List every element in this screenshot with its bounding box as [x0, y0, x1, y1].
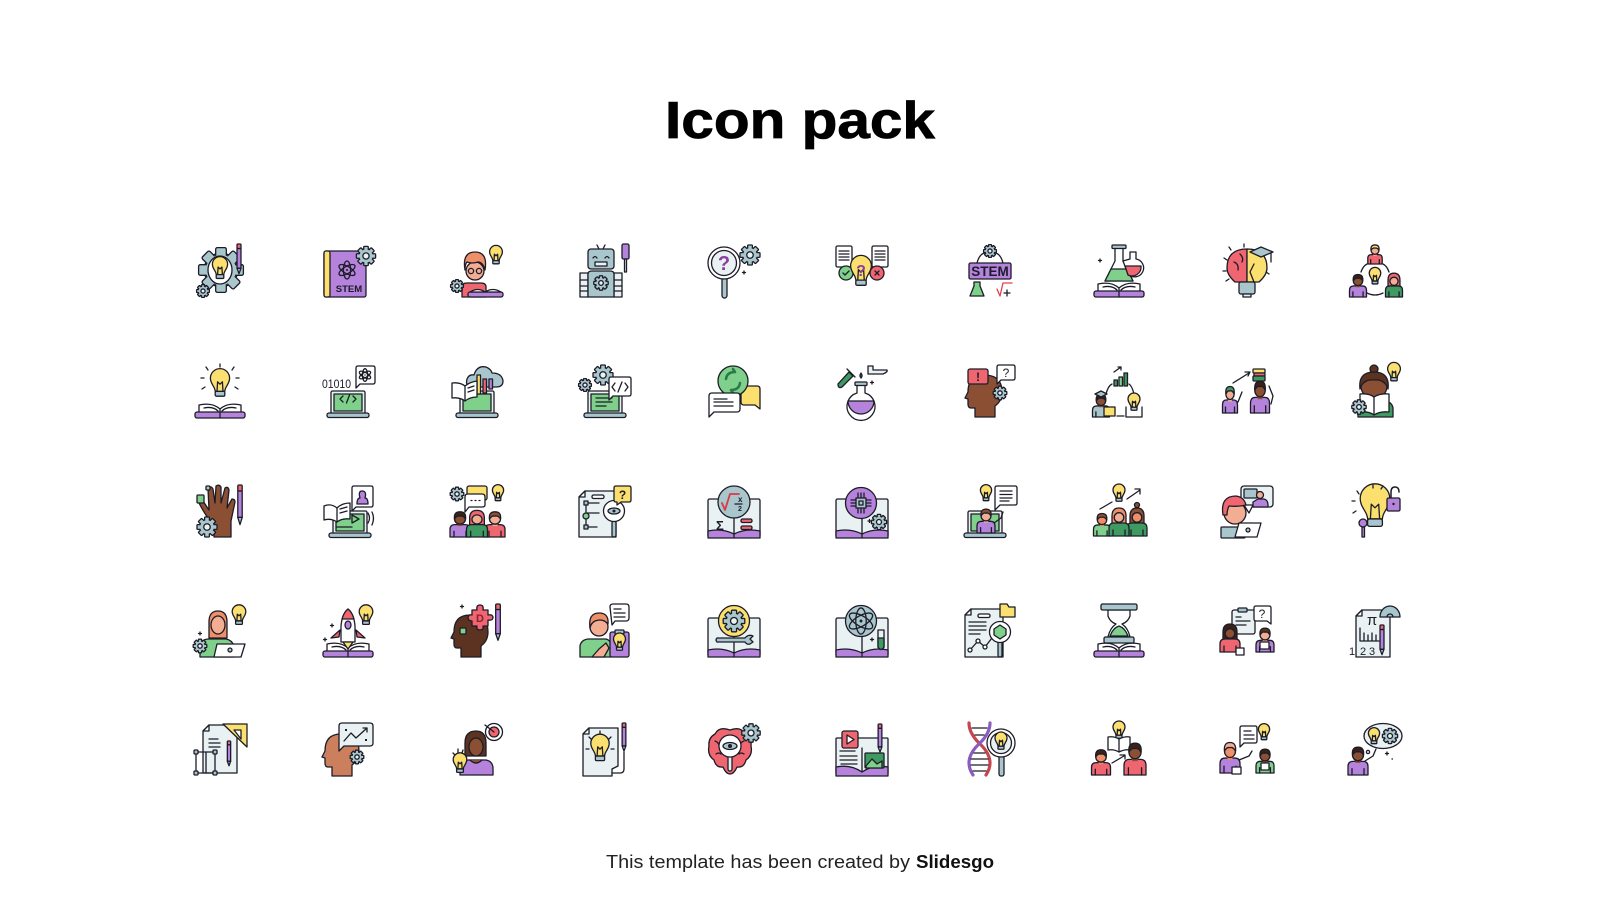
footer credit: Slidesgo	[916, 852, 994, 872]
icon: STEM book: STEM	[336, 284, 362, 295]
icon: math book: 2	[738, 506, 742, 513]
icon: mentor and student with idea	[1092, 721, 1146, 775]
icon: three people around a bulb	[1350, 245, 1402, 297]
icon: STEM banner	[969, 245, 1012, 296]
icon: person with glasses reading	[451, 245, 503, 297]
icon: head with chart bubble	[322, 723, 373, 776]
icon: two people with book stacks	[1222, 369, 1273, 413]
icon: chip book	[836, 488, 888, 538]
icon: online teacher with bubble	[964, 485, 1017, 538]
icon: gear and wrench book	[708, 606, 760, 657]
icon: data document with magnifier and folder	[965, 604, 1015, 657]
icon: flasks on a book	[1094, 245, 1144, 297]
icon: brain bulb with graduation cap	[1223, 244, 1273, 297]
icon: raised hand and pencil	[197, 485, 242, 537]
icon: head with puzzle and pen	[451, 604, 500, 657]
icon: head with puzzle and pen: D	[476, 613, 484, 625]
icon: STEM book	[324, 246, 376, 297]
icon: person reading with gear and bulb	[1352, 362, 1400, 417]
icon: two students with clipboard: ?	[1259, 607, 1266, 621]
icon: head with exclamation and question	[965, 365, 1015, 417]
icon: cloud, book and laptop	[452, 367, 503, 418]
icon: magnifier question and gear	[708, 245, 760, 298]
icon: video learning on laptop	[324, 486, 374, 538]
icon: bulb question between documents: ?	[856, 263, 866, 280]
icon: teacher and student with ideas	[1220, 724, 1274, 774]
icon: STEM banner: STEM	[971, 264, 1009, 279]
icon: flow document with eye magnifier	[579, 486, 631, 537]
icon: rocket from a book	[323, 605, 373, 657]
icon: multimedia book with pen	[836, 724, 888, 776]
icon: bulb with padlock and key	[1352, 484, 1400, 537]
icon: binary and laptop code	[322, 366, 375, 418]
icon: math document with protractor: 3	[1369, 646, 1375, 658]
icon: flow document with eye magnifier: ?	[619, 488, 626, 502]
icon: graduate, chart and idea cycle	[1092, 367, 1142, 417]
icon: head with exclamation and question: !	[976, 370, 980, 384]
icon: magnifier question and gear: ?	[718, 253, 730, 275]
footer credit: This template has been created by	[606, 852, 910, 872]
icon: math document with protractor: π	[1367, 612, 1377, 629]
icon: refresh and chat bubbles	[709, 366, 760, 417]
icon: math document with protractor: 1	[1349, 646, 1355, 658]
icon: bulb question between documents	[836, 246, 888, 285]
icon: laptop, gears and code bubble	[579, 365, 631, 418]
icon: math book: Σ	[716, 518, 724, 533]
icon: woman with target and bulb	[453, 724, 502, 775]
icon: head with exclamation and question: ?	[1003, 366, 1010, 380]
icon: math book	[708, 486, 760, 538]
icon: group of three with ideas	[450, 485, 505, 537]
icon: woman on laptop	[193, 605, 246, 657]
icon: person with thought bubble	[1348, 724, 1402, 775]
icon: math book: x	[738, 495, 743, 504]
icon: idea document and pen	[583, 723, 626, 776]
icon: math document with protractor: 2	[1360, 646, 1366, 658]
icon grid	[193, 244, 1403, 776]
icon: person video call	[1221, 486, 1273, 538]
title: Icon pack	[665, 92, 935, 150]
icon: two students with clipboard	[1220, 606, 1274, 655]
icon: robot and screwdriver	[580, 244, 629, 297]
icon: bulb over a book	[195, 364, 245, 418]
icon: brain with eye magnifier and gear	[709, 724, 760, 774]
icon: person with clipboard idea	[580, 604, 629, 657]
icon: binary and laptop code: 01010	[322, 377, 351, 391]
icon: round flask and test tube	[838, 366, 887, 420]
icon: blueprint with ruler triangle	[194, 724, 247, 775]
icon: math document with protractor	[1349, 606, 1400, 658]
icon: atom book with test tube	[836, 606, 888, 657]
icon: hourglass on book	[1094, 604, 1144, 657]
icon: gear with bulb and pencil	[197, 244, 243, 297]
icon: DNA with magnifier	[969, 723, 1015, 776]
icon: team growth with bulb	[1094, 484, 1147, 536]
